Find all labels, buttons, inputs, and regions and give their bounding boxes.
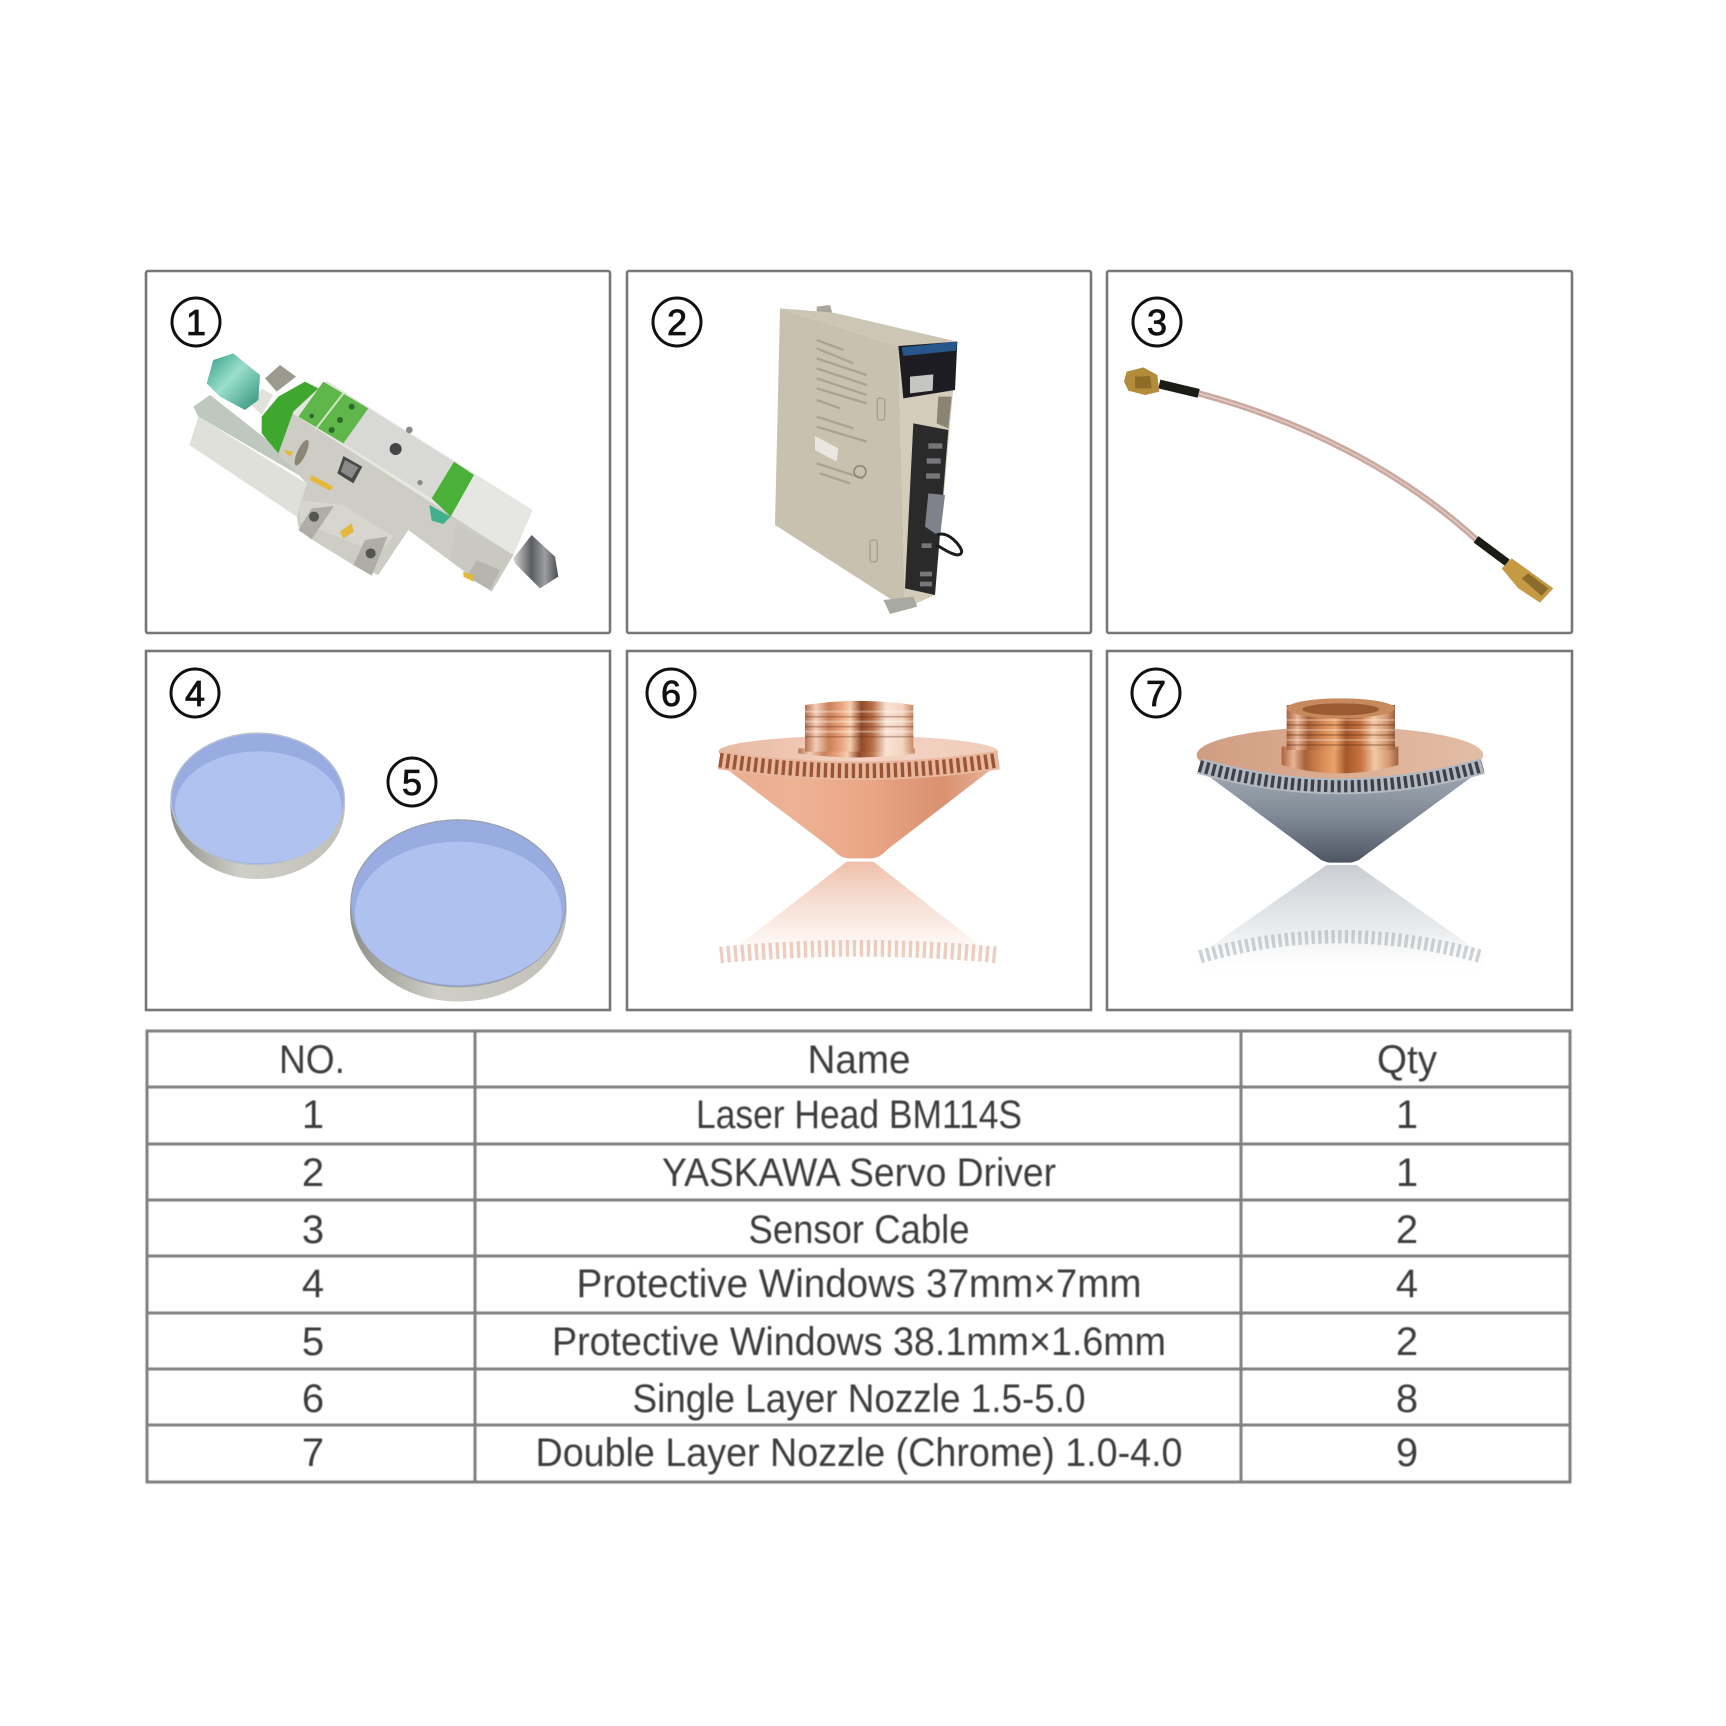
table row 5: 2 (1396, 1320, 1418, 1364)
number badge 1 (172, 298, 220, 346)
number badge 6: 6 (661, 673, 681, 714)
panel: sensor cable (1107, 271, 1572, 633)
icon: protective window large (350, 819, 567, 1002)
table header row (279, 1038, 1437, 1082)
table header row: NO. (279, 1038, 345, 1082)
icon: laser head photo (189, 353, 558, 592)
icon: chrome nozzle photo (1197, 698, 1483, 977)
number badge 2: 2 (667, 302, 687, 343)
table row 5 (302, 1320, 1418, 1364)
number badge 4: 4 (185, 673, 205, 714)
parts table (147, 1031, 1570, 1482)
table row 7 (302, 1431, 1418, 1475)
table row 7: Double Layer Nozzle (Chrome) 1.0-4.0 (536, 1431, 1182, 1475)
number badge 6 (647, 669, 695, 717)
table row 6: 8 (1396, 1377, 1418, 1421)
number badge 5: 5 (402, 762, 422, 803)
panel: servo driver (627, 271, 1091, 633)
table row 6: Single Layer Nozzle 1.5-5.0 (632, 1377, 1086, 1421)
table row 4: 4 (1396, 1262, 1418, 1306)
table row 1: 1 (302, 1093, 324, 1137)
table row 2: YASKAWA Servo Driver (662, 1151, 1056, 1195)
table row 5: 5 (302, 1320, 324, 1364)
table row 3 (302, 1208, 1418, 1252)
table row 3: 2 (1396, 1208, 1418, 1252)
table row 7: 9 (1396, 1431, 1418, 1475)
table row 5: Protective Windows 38.1mm×1.6mm (552, 1320, 1166, 1364)
table row 2 (302, 1151, 1418, 1195)
table header row: Qty (1377, 1038, 1437, 1082)
table row 2: 2 (302, 1151, 324, 1195)
number badge 3: 3 (1147, 302, 1167, 343)
table row 6 (302, 1377, 1418, 1421)
number badge 7 (1132, 669, 1180, 717)
table row 2: 1 (1396, 1151, 1418, 1195)
icon: servo driver photo (775, 305, 962, 614)
panel: single layer nozzle (627, 651, 1091, 1010)
number badge 5 (388, 758, 436, 806)
table row 3: Sensor Cable (748, 1208, 970, 1252)
icon: copper nozzle photo (718, 701, 998, 973)
table row 1: Laser Head BM114S (696, 1093, 1022, 1137)
number badge 4 (171, 669, 219, 717)
table row 1: 1 (1396, 1093, 1418, 1137)
number badge 1: 1 (186, 302, 206, 343)
table row 4 (302, 1262, 1418, 1306)
table row 6: 6 (302, 1377, 324, 1421)
table row 7: 7 (302, 1431, 324, 1475)
panel: laser head (146, 271, 610, 633)
panel: double layer chrome nozzle (1107, 651, 1572, 1010)
table row 3: 3 (302, 1208, 324, 1252)
table row 4: 4 (302, 1262, 324, 1306)
table row 4: Protective Windows 37mm×7mm (576, 1262, 1142, 1306)
number badge 2 (653, 298, 701, 346)
icon: protective window small (170, 732, 345, 879)
icon: sensor cable photo (1124, 367, 1553, 603)
table header row: Name (808, 1038, 910, 1082)
number badge 3 (1133, 298, 1181, 346)
panel: protective windows (146, 651, 610, 1010)
number badge 7: 7 (1146, 673, 1166, 714)
table row 1 (302, 1093, 1418, 1137)
